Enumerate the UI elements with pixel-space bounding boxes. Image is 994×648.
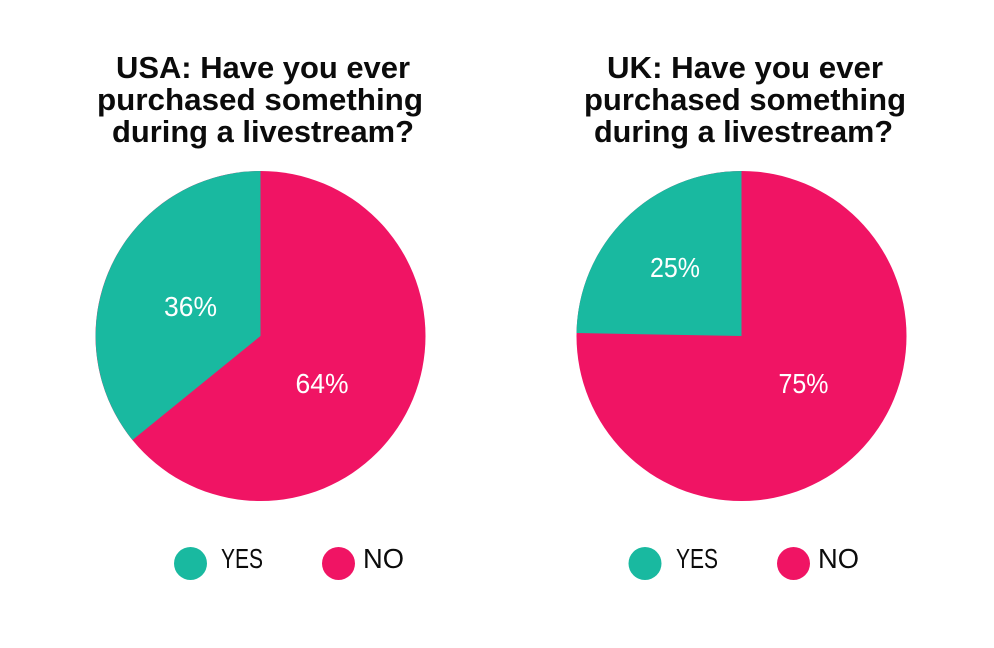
pie chart: USA: 36% — [164, 291, 217, 322]
legend: USA: YES — [221, 543, 263, 574]
heading: UK question: during a livestream? — [594, 114, 893, 149]
pie chart: UK: 25% — [650, 252, 700, 283]
heading: USA question: USA: Have you ever — [116, 50, 410, 85]
legend: USA — [174, 543, 404, 580]
legend: UK: YES — [676, 543, 718, 574]
pie chart: USA: 64% — [296, 368, 348, 399]
heading: USA question: purchased something — [97, 82, 423, 117]
pie chart: UK: 75% — [778, 368, 828, 399]
heading: UK question: purchased something — [584, 82, 906, 117]
heading: UK question: UK: Have you ever — [607, 50, 883, 85]
legend: USA: NO — [363, 543, 404, 574]
legend: UK: NO — [818, 543, 859, 574]
panel: USA — [96, 50, 426, 580]
pie chart: USA — [96, 171, 426, 501]
panel: UK — [576, 50, 906, 580]
heading: USA question: during a livestream? — [112, 114, 414, 149]
heading: USA question — [97, 50, 423, 149]
heading: UK question — [584, 50, 906, 149]
pie chart: UK — [576, 171, 906, 501]
legend: UK — [628, 543, 859, 580]
